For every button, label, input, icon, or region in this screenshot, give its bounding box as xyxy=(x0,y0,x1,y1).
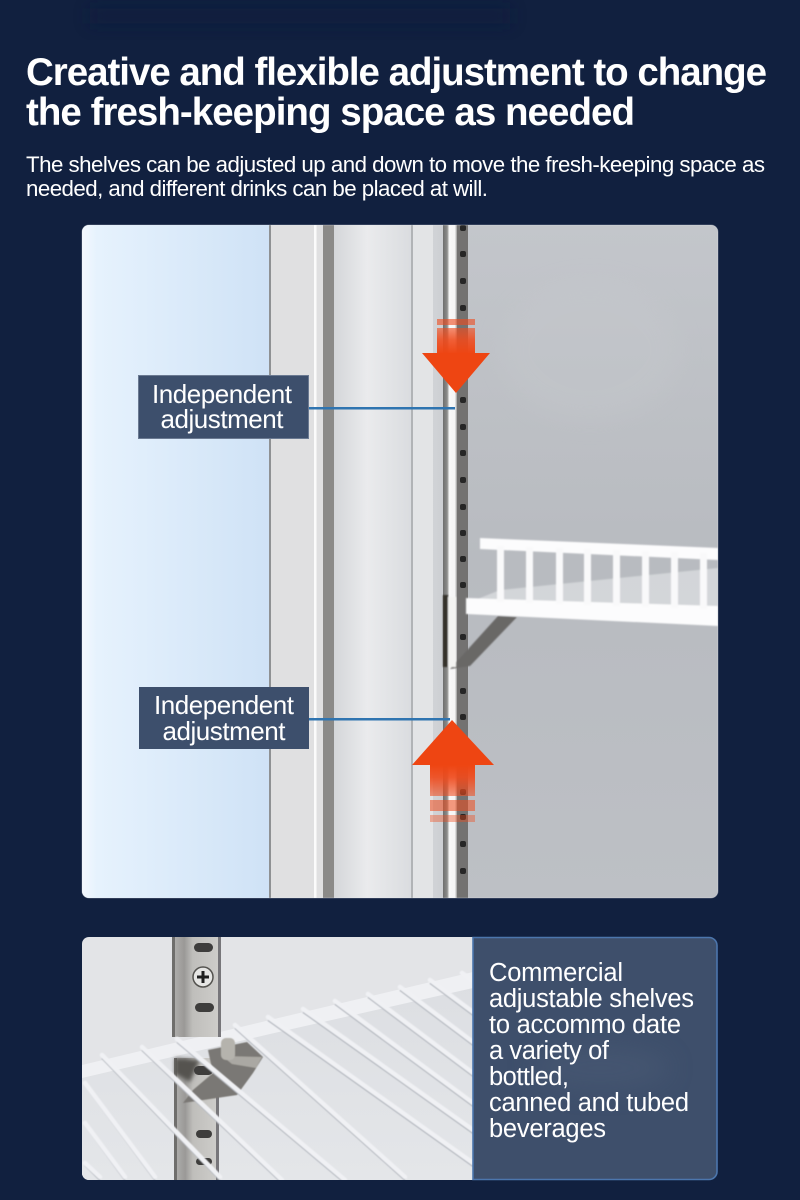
arrow: down xyxy=(422,319,490,393)
title: the fresh-keeping space as needed xyxy=(26,91,635,134)
panel: commercial shelves text xyxy=(473,938,717,1180)
callout: lower independent adjustment: Independent xyxy=(154,690,295,720)
callout: upper independent adjustment xyxy=(138,376,308,438)
callout: upper independent adjustment: adjustment xyxy=(160,404,284,434)
subtitle text: needed, and different drinks can be placed at will. xyxy=(26,176,488,201)
panel: commercial shelves text: a variety of xyxy=(489,1037,610,1065)
upright rail lower xyxy=(174,1058,219,1180)
subtitle text: The shelves can be adjusted up and down to move the fresh-keeping space as xyxy=(26,152,765,177)
arrow: up xyxy=(412,720,494,822)
callout: lower independent adjustment: adjustment xyxy=(162,716,286,746)
panel: commercial shelves text: to accommo date xyxy=(489,1011,681,1039)
callout: upper independent adjustment: Independent xyxy=(152,379,293,409)
shelf wires xyxy=(85,973,473,1183)
panel: commercial shelves text: canned and tubed xyxy=(489,1089,689,1117)
upright rail upper xyxy=(172,937,221,1037)
title xyxy=(26,51,767,134)
panel border corners xyxy=(82,225,718,898)
panel: commercial shelves text: bottled, xyxy=(489,1063,569,1091)
panel: commercial shelves text: beverages xyxy=(489,1115,606,1143)
subtitle text xyxy=(26,152,765,201)
panel: commercial shelves text: Commercial xyxy=(489,959,623,987)
panel: shelf detail photo xyxy=(82,937,473,1183)
shelf clip bracket xyxy=(183,1038,263,1103)
panel: commercial shelves text: adjustable shelves xyxy=(489,985,694,1013)
leader line: lower xyxy=(308,718,450,720)
rail holes xyxy=(460,225,466,874)
panel: shelf rail photo xyxy=(82,225,718,898)
title: Creative and flexible adjustment to change xyxy=(26,51,767,94)
leader line: upper xyxy=(308,407,455,410)
wire shelf xyxy=(443,538,718,669)
shelf deck xyxy=(82,1174,89,1180)
callout: lower independent adjustment xyxy=(139,687,309,749)
